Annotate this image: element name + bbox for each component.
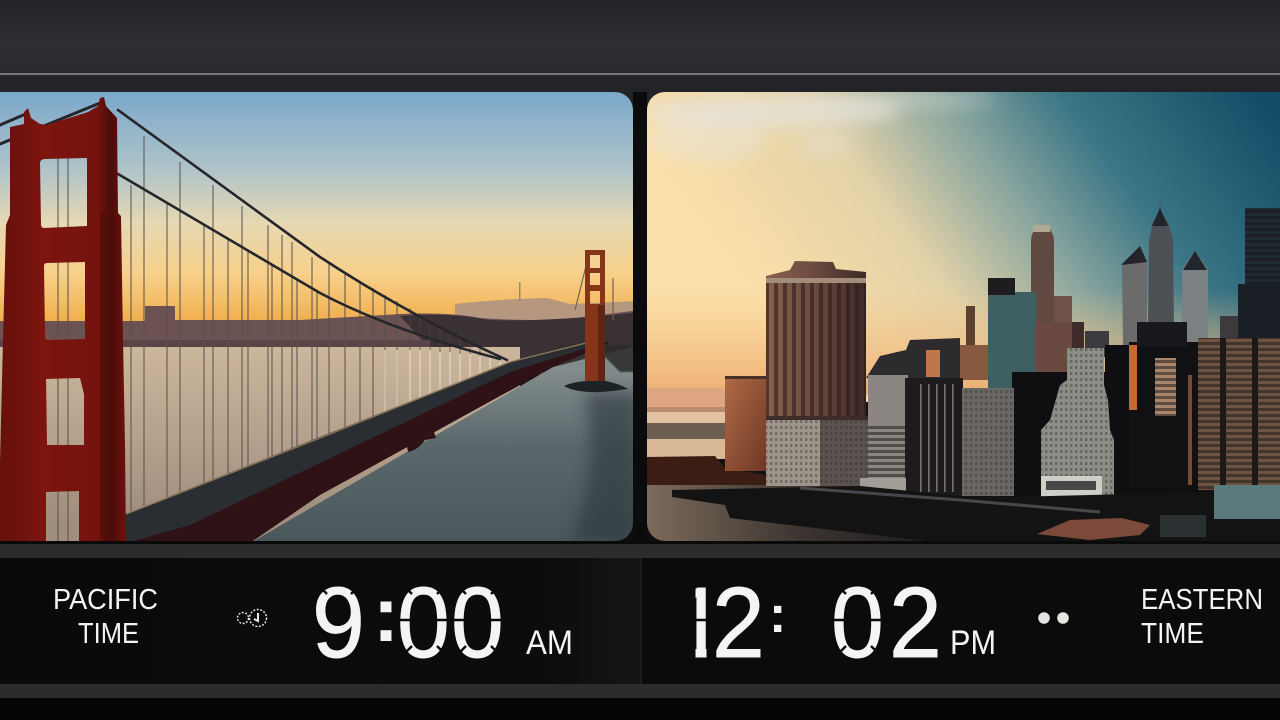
icon: dotted clock circles xyxy=(238,610,266,626)
time: 12:02 PM: PM xyxy=(950,624,996,662)
copper tower xyxy=(725,376,766,471)
panel: Eastern clock display xyxy=(640,558,1280,684)
far bridge tower xyxy=(564,250,628,392)
label: Pacific Time: PACIFIC xyxy=(53,584,158,616)
clouds xyxy=(640,93,1000,162)
bay water xyxy=(0,345,640,547)
time: 9:00 AM: 0 xyxy=(451,567,504,679)
dark midtown mass xyxy=(1012,322,1202,497)
time: 12:02 PM: 1 xyxy=(673,567,726,679)
time: 9:00 AM: : xyxy=(373,570,399,658)
panel: lower bezel bands xyxy=(0,541,1280,720)
label: Eastern Time xyxy=(1141,584,1263,650)
panel: Golden Gate Bridge photo xyxy=(0,92,640,547)
panel: top bezel xyxy=(0,0,1280,545)
ornate white building xyxy=(1041,348,1114,502)
label: Eastern Time: TIME xyxy=(1141,618,1204,650)
near bridge tower xyxy=(0,97,126,545)
label: Pacific Time: TIME xyxy=(78,618,139,650)
waterfront and foreground piers xyxy=(672,485,1280,545)
time: 12:02 PM: 2 xyxy=(889,567,942,679)
time: 9:00 AM: AM xyxy=(526,624,573,662)
panel: New York skyline photo xyxy=(640,92,1280,545)
indicator dots xyxy=(1038,612,1069,624)
time: 12:02 PM: : xyxy=(769,586,786,644)
harbour and far shore xyxy=(647,388,924,541)
label: Eastern Time: EASTERN xyxy=(1141,584,1263,616)
time: 9:00 AM: 9 xyxy=(312,567,365,679)
mid-rise cluster xyxy=(860,338,1014,496)
teal glass tower xyxy=(988,278,1036,390)
time: 12:02 PM: 2 xyxy=(712,567,765,679)
right tan striped building xyxy=(1198,338,1280,490)
main cables xyxy=(0,103,507,360)
time: 9:00 AM: 0 xyxy=(397,567,450,679)
rear skyline towers xyxy=(960,198,1280,380)
sky: dawn gradient xyxy=(647,92,1280,402)
bridge deck xyxy=(120,340,610,545)
time: 9:00 AM xyxy=(312,567,573,679)
sky: sunrise gradient xyxy=(0,92,633,321)
time: 12:02 PM: 0 xyxy=(831,567,884,679)
label: Pacific Time xyxy=(53,584,158,650)
distant hills xyxy=(0,282,640,375)
large beige tower xyxy=(766,261,870,486)
suspender cables xyxy=(58,136,500,541)
panel: Pacific clock display xyxy=(0,558,640,684)
time: 12:02 PM xyxy=(670,567,996,679)
